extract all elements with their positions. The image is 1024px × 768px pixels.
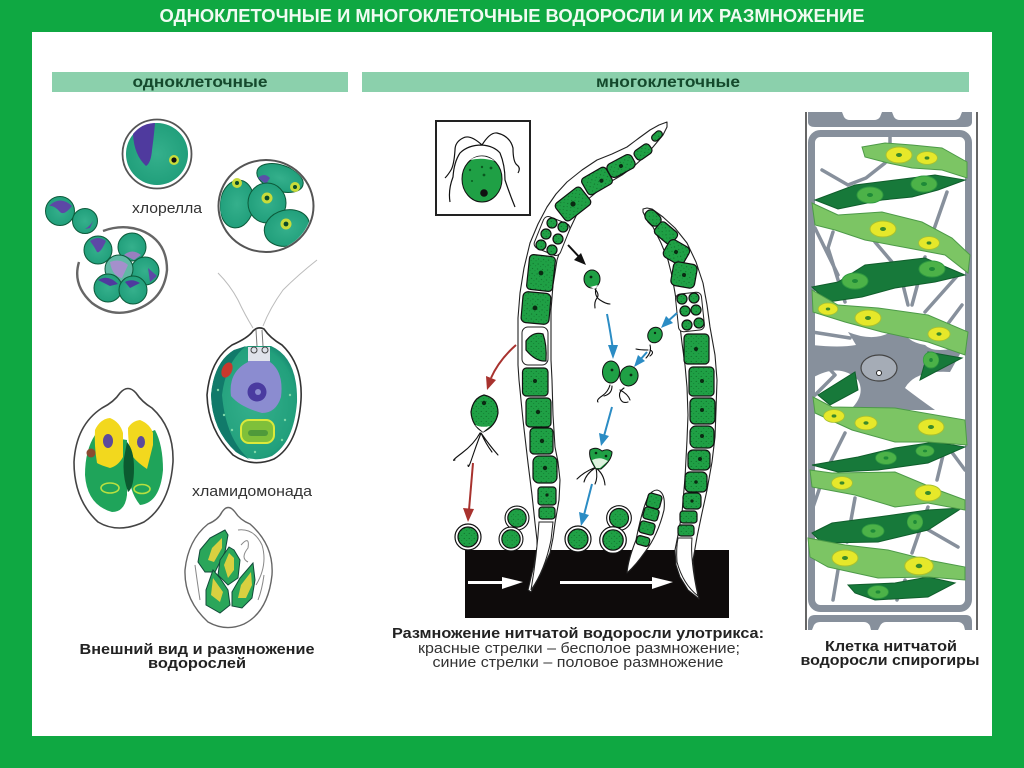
cells: gamete cluster right bbox=[675, 292, 705, 332]
chlorella single cell bbox=[122, 120, 192, 188]
chloroplast dark bands bbox=[812, 175, 965, 600]
caption: unicellular: Внешний вид и размножение bbox=[80, 641, 314, 658]
spore top bbox=[584, 270, 610, 308]
caption: ulothrix: красные стрелки – бесполое размножение; bbox=[418, 641, 740, 657]
chlamydomonas zoospores in mother cell bbox=[185, 508, 272, 628]
cell walls bbox=[806, 112, 977, 630]
arrow: red 1 bbox=[486, 345, 516, 390]
nucleus and central cytoplasm bbox=[812, 325, 965, 410]
spore on ground 1 bbox=[455, 524, 481, 550]
chlorella four daughter cells bbox=[217, 158, 314, 252]
cytoplasm strands bbox=[812, 135, 965, 600]
white arrow short bbox=[468, 577, 523, 589]
label: chlamydomonas: хламидомонада bbox=[192, 483, 313, 500]
spore on ground 5 bbox=[607, 506, 631, 530]
arrow: blue 2 bbox=[661, 313, 677, 328]
heading: multicellular: многоклеточные bbox=[596, 74, 740, 91]
chloroplast light bands bbox=[808, 143, 970, 580]
heading: unicellular: одноклеточные bbox=[132, 74, 268, 91]
caption: ulothrix bbox=[392, 625, 764, 671]
spirogyra cell bbox=[806, 112, 977, 630]
caption: ulothrix: Размножение нитчатой водоросли улотрикса: bbox=[392, 625, 764, 642]
label: chlorella: хлорелла bbox=[132, 200, 203, 217]
spore on ground 2 bbox=[505, 506, 529, 530]
soil bbox=[465, 550, 729, 618]
heading: unicellular bbox=[52, 72, 348, 92]
arrow: blue 3 bbox=[634, 352, 647, 367]
spore on ground 6 bbox=[600, 527, 626, 553]
caption: spirogyra bbox=[800, 638, 980, 669]
heading: multicellular bbox=[362, 72, 969, 92]
caption: unicellular: водорослей bbox=[148, 655, 246, 672]
cells bbox=[642, 207, 715, 536]
title: ОДНОКЛЕТОЧНЫЕ И МНОГОКЛЕТОЧНЫЕ ВОДОРОСЛИ И ИХ РАЗМНОЖЕНИЕ bbox=[160, 6, 864, 26]
zoospores and zygotes bbox=[454, 270, 665, 553]
cells: gamete cluster left bbox=[533, 215, 571, 257]
caption: unicellular bbox=[80, 641, 314, 672]
chlorella group bbox=[46, 120, 314, 313]
inset: gamete bbox=[436, 121, 530, 215]
arrow: red 2 bbox=[463, 463, 474, 522]
arrow: blue 1 bbox=[607, 314, 618, 359]
arrow: blue 4 bbox=[599, 407, 612, 446]
chlamydomonas main cell bbox=[207, 260, 317, 463]
filament left bbox=[518, 122, 667, 592]
spore right bbox=[636, 325, 665, 358]
spore on ground 4 bbox=[565, 526, 591, 552]
cells bbox=[521, 129, 664, 519]
caption: spirogyra: водоросли спирогиры bbox=[800, 652, 980, 669]
pair of gametes bbox=[598, 361, 640, 402]
zygote with four flagella bbox=[577, 448, 612, 485]
chlorella colony with released cells bbox=[46, 196, 167, 313]
white arrow long bbox=[560, 577, 673, 589]
chlamydomonas dividing in two bbox=[74, 388, 173, 528]
arrow: blue 5 bbox=[579, 484, 592, 526]
young filament bbox=[627, 490, 664, 573]
large zoospore bbox=[454, 395, 498, 466]
caption: ulothrix: синие стрелки – половое размножение bbox=[432, 655, 724, 671]
arrow: black bbox=[568, 245, 586, 265]
caption: spirogyra: Клетка нитчатой bbox=[825, 638, 957, 655]
filament right bbox=[642, 207, 717, 599]
spore on ground 3 bbox=[499, 527, 523, 551]
